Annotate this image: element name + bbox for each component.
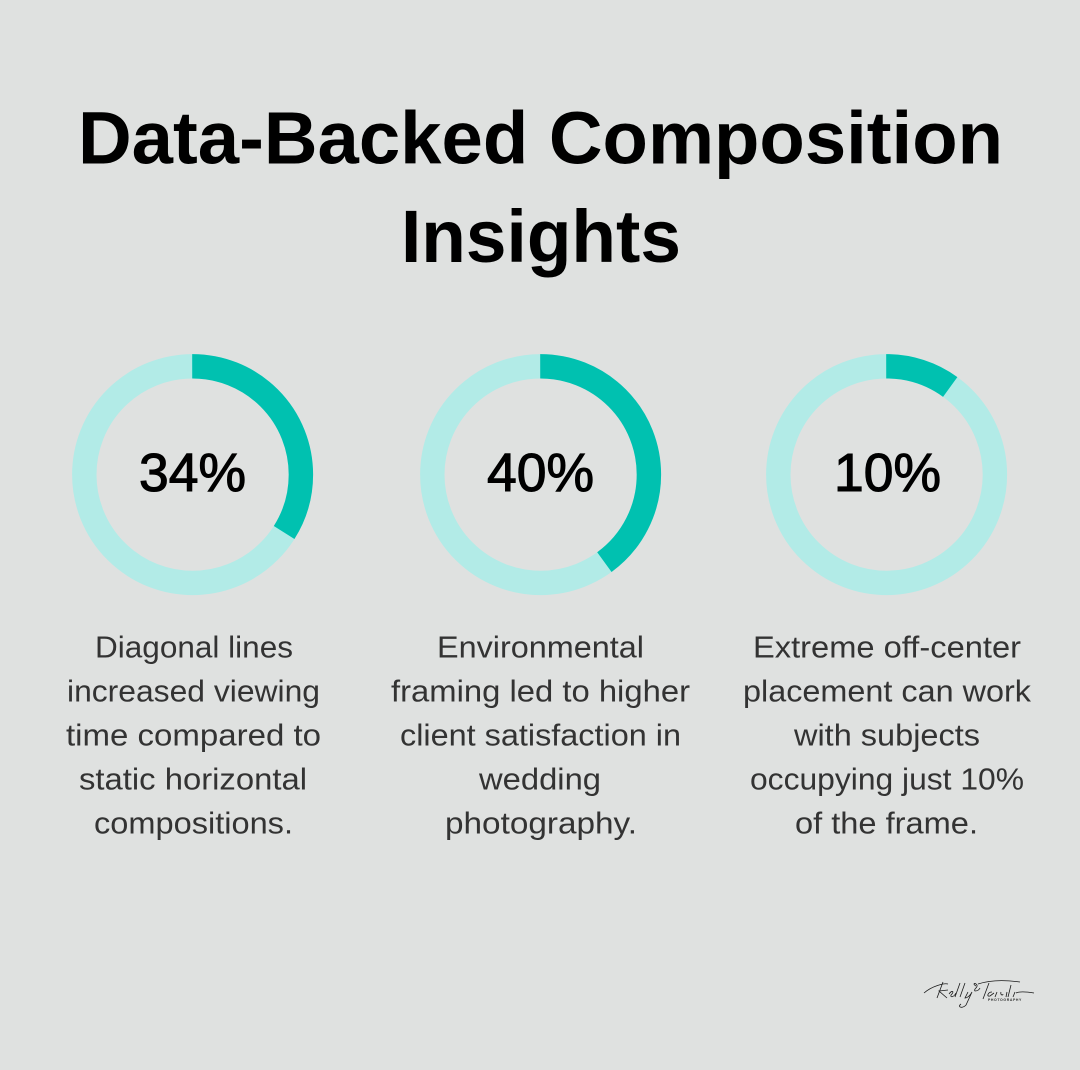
donut chart: 10%: [778, 366, 995, 583]
donut chart: 40%: 40%: [487, 443, 594, 503]
text: off-center placement description: placement can work: [743, 674, 1032, 708]
panel: 34% diagonal lines: [66, 366, 321, 840]
text: diagonal lines description: Diagonal lines: [95, 630, 293, 664]
text: off-center placement description: [743, 630, 1032, 840]
panel: 10% off-center placement: [743, 366, 1032, 840]
title: Insights: [401, 195, 681, 278]
donut chart: 34%: [84, 366, 301, 583]
text: off-center placement description: Extreme off-center: [753, 630, 1021, 664]
text: off-center placement description: with subjects: [793, 718, 980, 752]
donut chart: 34%: 34%: [139, 443, 246, 503]
text: environmental framing description: photography.: [445, 806, 637, 840]
text: diagonal lines description: time compared to: [66, 718, 321, 752]
text: environmental framing description: framing led to higher: [391, 674, 690, 708]
text: off-center placement description: occupying just 10%: [750, 762, 1024, 796]
text: environmental framing description: wedding: [478, 762, 601, 796]
text: diagonal lines description: [66, 630, 321, 840]
text: off-center placement description: of the frame.: [795, 806, 978, 840]
panel: 40% environmental framing: [391, 366, 690, 840]
text: environmental framing description: [391, 630, 690, 840]
logo: signature: PHOTOGRAPHY: [988, 998, 1022, 1002]
title: Data-Backed Composition: [78, 96, 1003, 180]
logo: signature: [924, 981, 1034, 1007]
text: diagonal lines description: compositions.: [94, 806, 293, 840]
text: environmental framing description: client satisfaction in: [400, 718, 681, 752]
title: [78, 96, 1003, 278]
text: diagonal lines description: increased viewing: [67, 674, 320, 708]
donut chart: 10%: 10%: [834, 443, 941, 503]
text: environmental framing description: Environmental: [437, 630, 644, 664]
donut chart: 40%: [432, 366, 649, 583]
text: diagonal lines description: static horizontal: [79, 762, 307, 796]
